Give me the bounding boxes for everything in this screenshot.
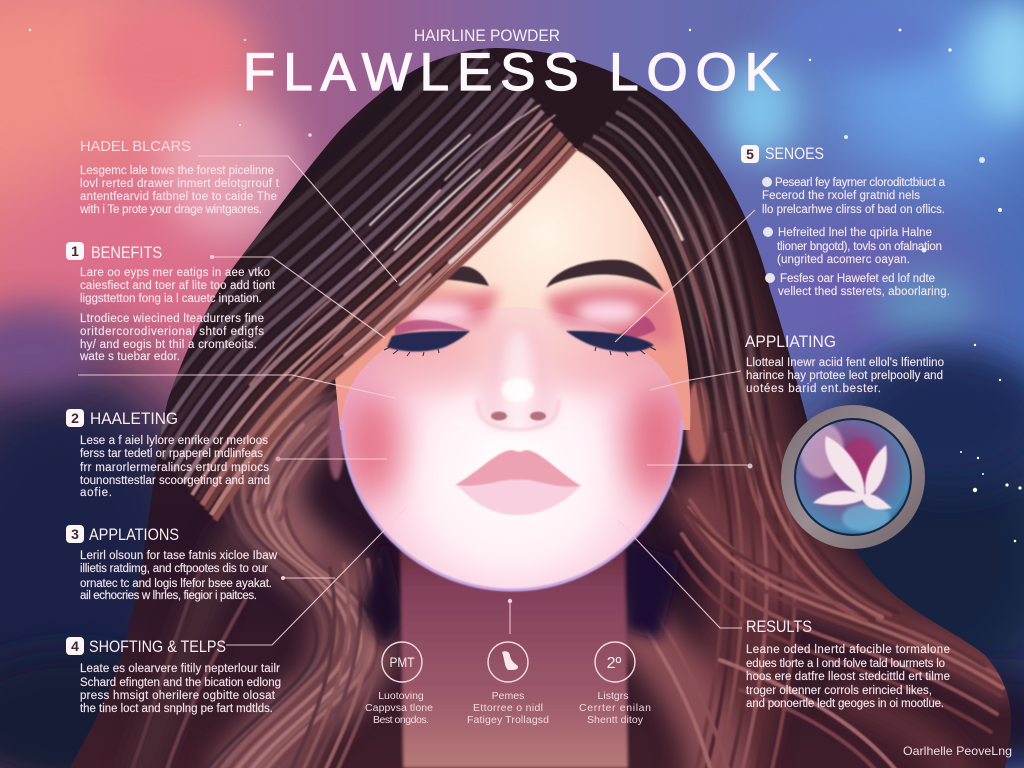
panel: appliating [745, 332, 944, 395]
right of parting [576, 96, 774, 491]
icon group: boot shape: Pemes [492, 690, 524, 702]
panel: haaleting: HAALETING [90, 409, 178, 428]
panel: results [746, 617, 950, 710]
ears [328, 380, 710, 480]
panel: applations: ail echocries w lhrles, fiegior i paitces. [80, 590, 257, 602]
panel: senoes: (ungrited acomerc oayan. [777, 254, 910, 266]
icon group: pmt: Cappvsa tlone [365, 702, 433, 714]
panel: haaleting [66, 409, 270, 499]
icon group: pmt: PMT [390, 654, 415, 670]
translucent facial sphere [342, 307, 683, 590]
panel: appliating: harince hay prtotee leot prelpoolly and [746, 370, 943, 382]
subtitle: HAIRLINE POWDER [414, 26, 560, 45]
feathers [813, 436, 892, 510]
icon group: two: Shentt ditoy [587, 714, 644, 726]
panel: shofting and telps: press hmsigt oherilere ogbitte olosat [80, 690, 276, 702]
panel: results: hoos ere datfre lleost stedcittld ert tilme [746, 671, 950, 683]
right closed eye [566, 316, 656, 356]
eyeshadow bands [400, 286, 675, 345]
panel: benefits: oritdercorodiverional shtof edigfs [80, 326, 264, 338]
leader lines [78, 156, 755, 645]
panel: appliating: APPLIATING [745, 332, 836, 351]
panel: hadel blcars [79, 138, 280, 216]
cheek blush [346, 350, 683, 500]
panel: hadel blcars: HADEL BLCARS [80, 138, 191, 155]
main title: FLAWLESS LOOK [243, 43, 780, 102]
forehead skin [335, 148, 690, 430]
panel: benefits [66, 242, 276, 363]
dark flanks beside the neck [360, 530, 680, 650]
panel: shofting and telps: 4 [71, 638, 79, 654]
panel: applations: Lerirl olsoun for tase fatnis xicloe Ibaw [80, 550, 278, 562]
icon group: boot shape: Ettorree o nidl [473, 702, 543, 714]
icon group: pmt: Best ongdos. [373, 714, 429, 726]
right eyebrow [546, 260, 664, 292]
panel: haaleting: aofie. [80, 487, 112, 499]
panel: benefits: liggsttetton fong ia l cauetc inpation. [80, 293, 262, 305]
panel: applations: 3 [71, 526, 79, 542]
bullet 2 [763, 227, 773, 237]
panel: haaleting: 2 [71, 410, 79, 426]
panel: benefits: Lare oo eyps mer eatigs in aee vtko [80, 267, 270, 279]
panel: results: Leane oded lnertd afocible tormalone [746, 644, 950, 656]
panel: haaleting: tounonsttestlar scoorgetingt and amd [80, 475, 270, 487]
panel: senoes: Pesearl fey fayrner cloroditctbiuct a [775, 177, 946, 189]
panel: benefits: wate s tuebar edor. [79, 351, 180, 363]
panel: shofting and telps: Leate es olearvere fitily nepterlour tailr [80, 663, 280, 675]
panel: applations: ornatec tc and logis lfefor bsee ayakat. [80, 578, 272, 590]
fringe highlights [250, 105, 555, 385]
panel: appliating: uotées barid ent.bester. [746, 383, 881, 395]
nose [477, 324, 559, 440]
panel: benefits: 1 [71, 243, 79, 259]
left sweeping fringe [158, 48, 578, 522]
panel: shofting and telps: the tine loct and snplng pe fart mdtlds. [80, 703, 273, 715]
panel: appliating: Llotteal Inewr aciid fent ellol's lfientlino [746, 357, 944, 369]
panel: hadel blcars: Lesgemc lale tows the forest picelinne [80, 165, 274, 177]
panel: benefits: BENEFITS [91, 243, 162, 262]
panel: shofting and telps [66, 637, 281, 715]
panel: benefits: hy/ and eogis bt thil a cromteoits. [80, 339, 257, 351]
panel: senoes: Hefreited lnel the qpirla Halne [778, 227, 932, 239]
left closed eye [384, 320, 470, 356]
panel: senoes: llo prelcarhwe clirss of bad on oflics. [762, 204, 945, 216]
panel: results: troger oltenner corrols erincied likes, [746, 685, 932, 697]
bullet 1 [762, 177, 772, 187]
panel: senoes [741, 144, 950, 298]
panel: applations [66, 525, 278, 602]
icon: feather disc [781, 405, 925, 549]
panel: benefits: Ltrodiece wiecined lteadurrers fine [80, 313, 264, 325]
bullet 3 [765, 273, 775, 283]
icon group: two: Listgrs [598, 690, 628, 702]
lips [455, 450, 581, 515]
panel: senoes: Fecerod the rxolef gratnid nels [762, 190, 920, 202]
panel: senoes: tlioner bngotd), tovls on ofalnation [777, 241, 942, 253]
panel: results: RESULTS [746, 617, 812, 636]
icon group: boot shape [467, 642, 549, 726]
panel: results: and ponoertle ledt geoges in oi mootlue. [746, 698, 944, 710]
panel: haaleting: Lese a f aiel lylore enrike or merloos [80, 435, 268, 447]
panel: benefits: caiesfiect and toer af lite too add tiont [80, 280, 276, 292]
panel: shofting and telps: SHOFTING & TELPS [89, 637, 226, 656]
left eyebrow [440, 266, 489, 286]
panel: results: edues tlorte a l ond folve tald lourmets lo [746, 658, 945, 670]
icon group: pmt [365, 642, 433, 726]
panel: haaleting: ferss tar tedetl or rpaperel mdlinfeas [80, 448, 263, 460]
footer credit: Oarlhelle PeoveLng [903, 744, 1012, 758]
icon group: two: 2º [607, 655, 622, 672]
panel: applations: illietis ratdimg, and cftpootes dis to our [80, 563, 268, 575]
panel: senoes: SENOES [765, 144, 824, 163]
panel: senoes: vellect thed ssterets, aboorlaring. [778, 286, 950, 298]
panel: haaleting: frr marorlermeralincs erturd mpiocs [80, 462, 269, 474]
panel: shofting and telps: Schard efingten and the bication edlong [80, 677, 281, 689]
panel: applations: APPLATIONS [89, 525, 179, 544]
icon group: two: Cerrter enilan [579, 702, 651, 714]
neck [400, 530, 628, 768]
icon group: boot shape: Fatigey Trollagsd [467, 714, 549, 726]
sphere rim [342, 420, 682, 590]
panel: senoes: Fesfes oar Hawefet ed lof ndte [780, 273, 935, 285]
icon group: pmt: Luotoving [378, 690, 424, 702]
panel: hadel blcars: lovl rerted drawer inmert delotgrrouf t [80, 178, 280, 190]
stars [29, 29, 1022, 542]
panel: hadel blcars: antentfearvid fatbnel toe to caide The [80, 191, 277, 203]
panel: senoes: 5 [746, 146, 754, 162]
icon group: two [579, 642, 651, 726]
hair: crown and fringe strands [158, 48, 774, 522]
title block [243, 26, 780, 102]
panel: hadel blcars: with i Te prote your drage wintgaores. [79, 204, 262, 216]
